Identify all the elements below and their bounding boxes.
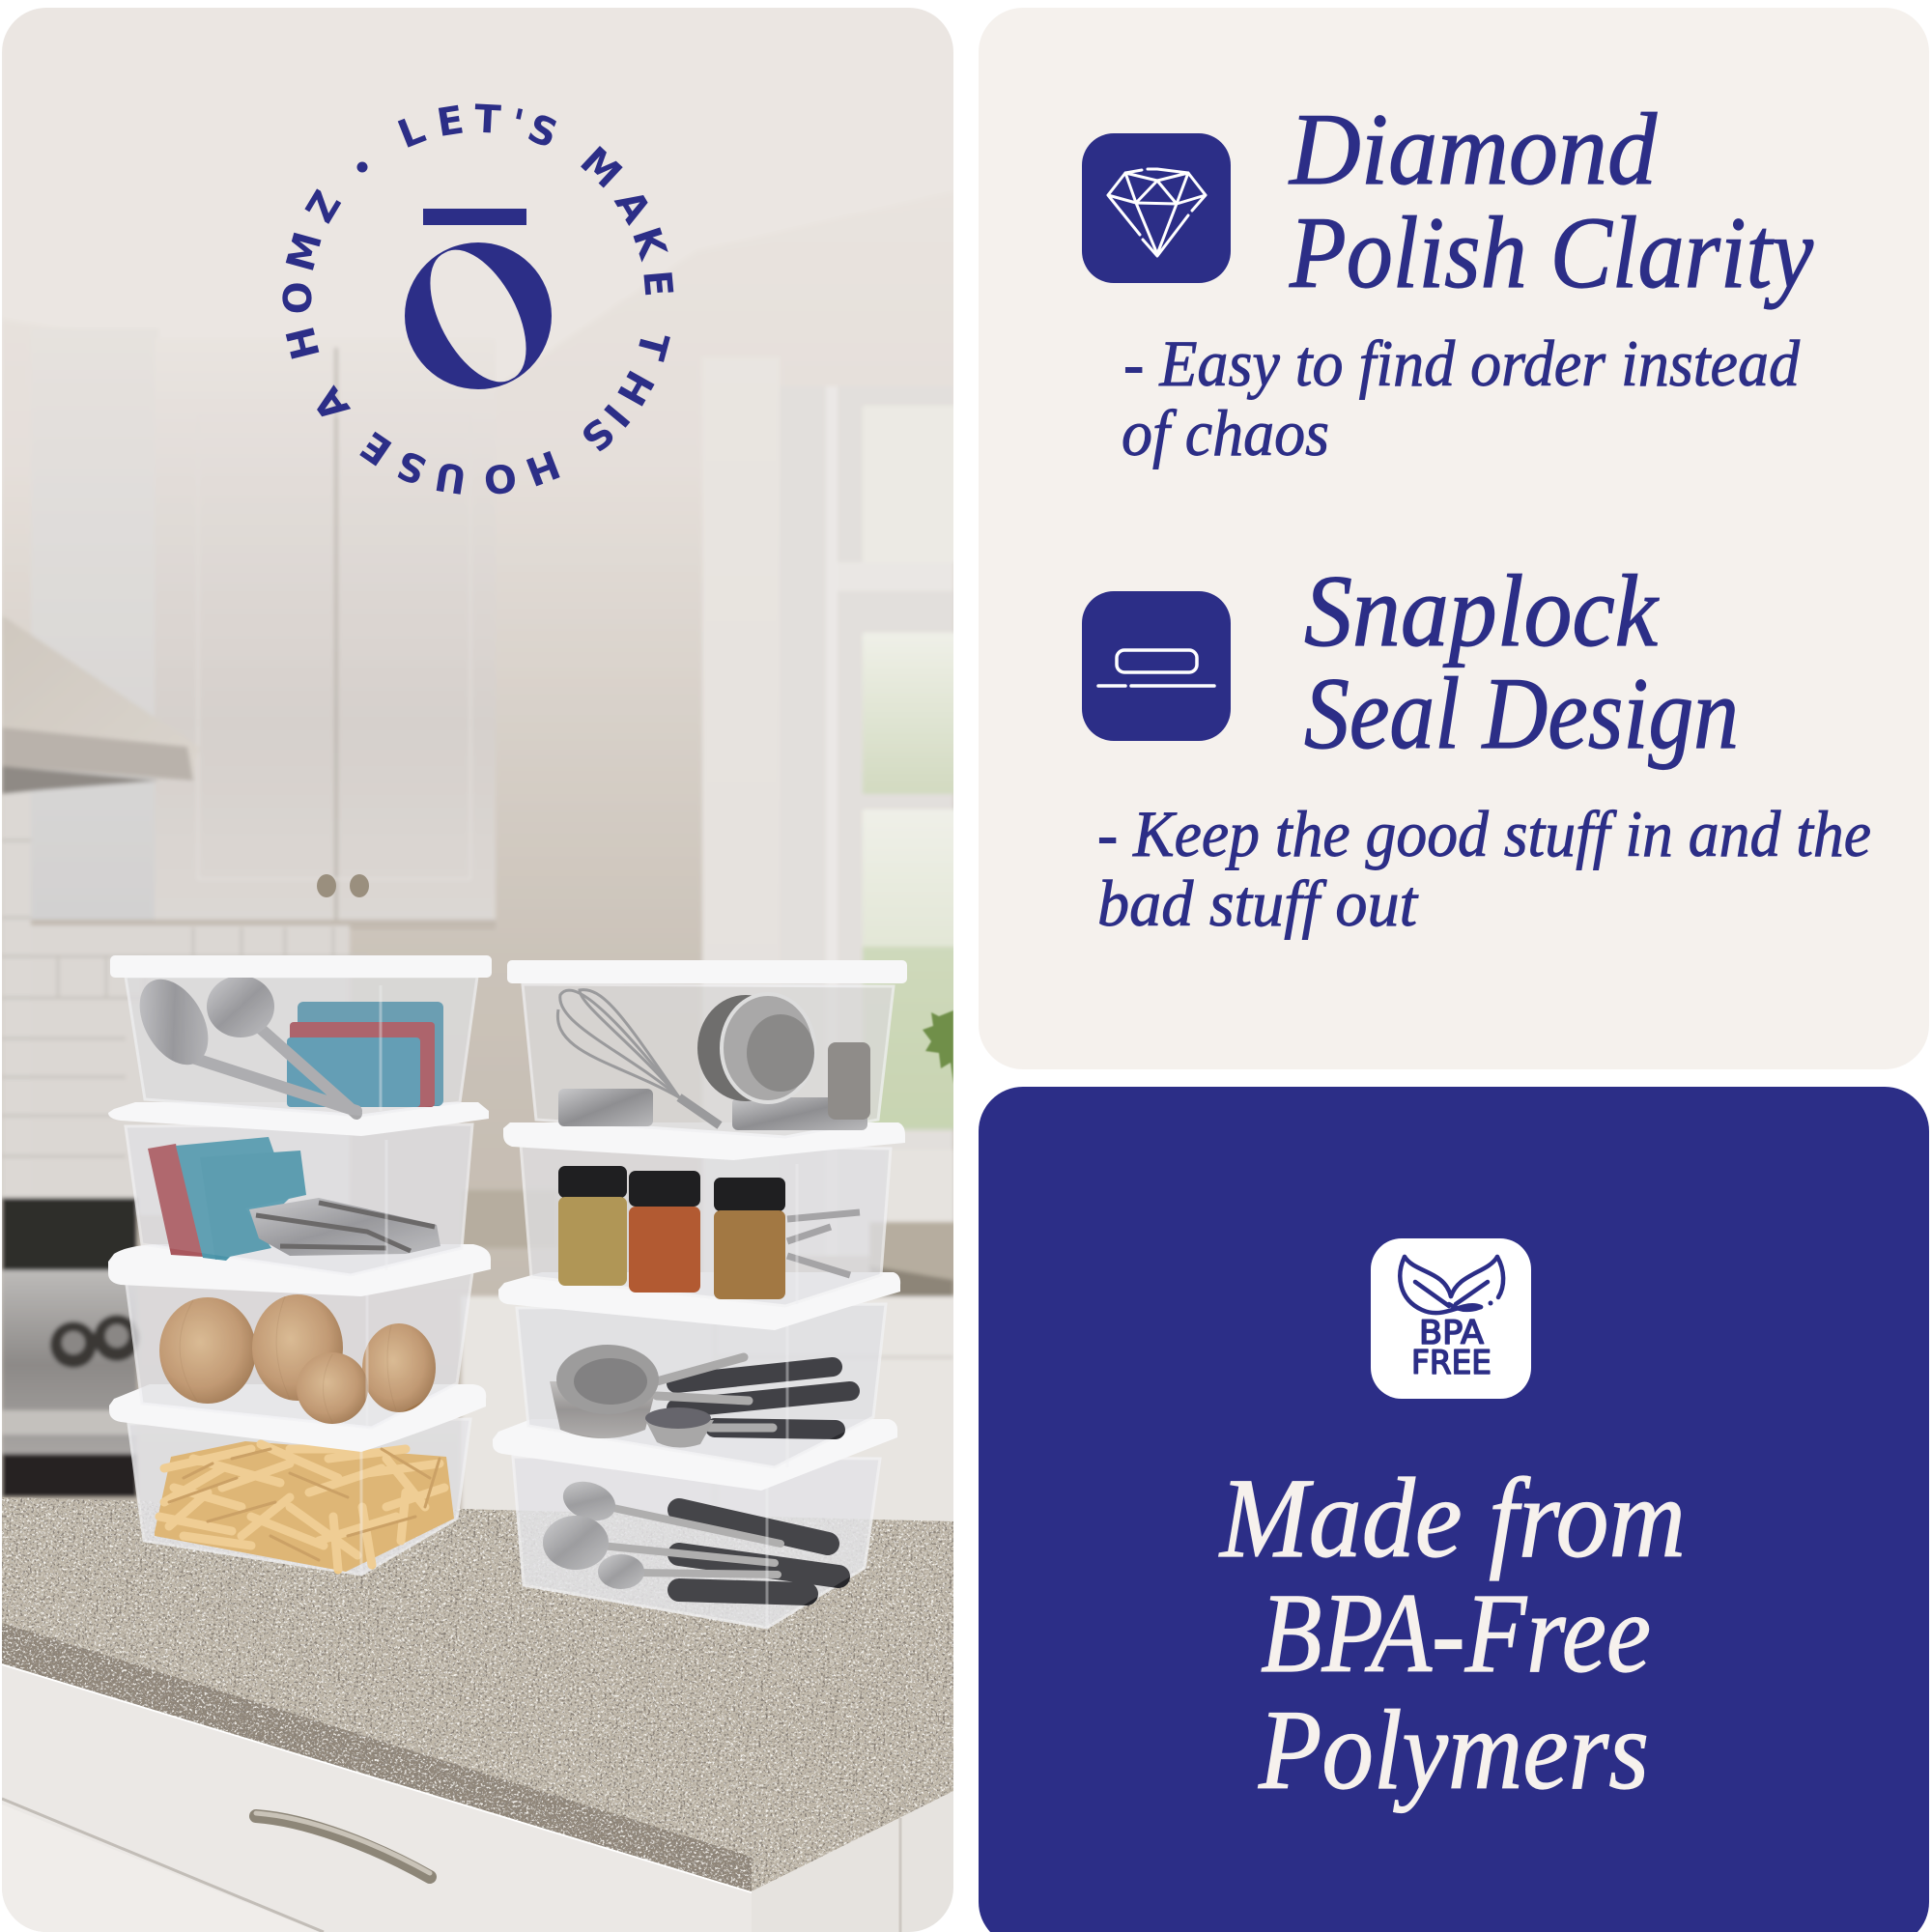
kitchen background bbox=[0, 0, 966, 1546]
container: cutting boards and tongs bbox=[108, 1102, 489, 1275]
cabinet knobs bbox=[317, 874, 369, 897]
range hood bbox=[2, 615, 199, 794]
plant in window bbox=[923, 1010, 953, 1084]
circular slogan: H bbox=[278, 322, 329, 364]
icon: BPA free badge: BPA bbox=[1419, 1314, 1484, 1352]
back counter and lower cabinets bbox=[462, 1150, 966, 1528]
circular slogan: I bbox=[594, 395, 638, 435]
circular slogan: S bbox=[572, 409, 622, 460]
circular slogan: T bbox=[473, 98, 502, 143]
heading: made from BPA-free polymers: Made from bbox=[1218, 1455, 1686, 1581]
circular slogan: O bbox=[481, 454, 519, 502]
granite counter bbox=[2, 1497, 953, 1891]
drawer fronts bbox=[2, 1665, 953, 1932]
circular slogan: E bbox=[634, 269, 680, 298]
panel: features bbox=[979, 8, 1929, 1069]
icon: snaplock seal bbox=[1082, 591, 1231, 741]
icon: diamond bbox=[1082, 133, 1231, 283]
icon: BPA free badge bbox=[1371, 1238, 1531, 1399]
circular slogan: K bbox=[623, 222, 675, 266]
circular slogan: H bbox=[520, 440, 566, 494]
heading: snaplock seal design bbox=[1304, 554, 1739, 770]
container: measuring cups bbox=[498, 1272, 900, 1467]
circular slogan bbox=[276, 98, 680, 502]
stove bbox=[2, 1198, 140, 1497]
circular slogan: ' bbox=[506, 101, 527, 147]
heading: made from BPA-free polymers: BPA-Free bbox=[1261, 1570, 1651, 1696]
circular slogan: S bbox=[390, 440, 433, 493]
text: easy to find order bbox=[1122, 327, 1801, 469]
tile backsplash bbox=[2, 782, 367, 1215]
heading: diamond polish clarity: Polish Clarity bbox=[1289, 196, 1814, 309]
circular slogan: E bbox=[354, 422, 400, 473]
text: keep the good stuff: - Keep the good stuff in and the bbox=[1097, 797, 1871, 870]
circular slogan: A bbox=[305, 379, 358, 429]
circular slogan: M bbox=[278, 227, 331, 276]
circular slogan: M bbox=[572, 139, 630, 197]
circular slogan: S bbox=[522, 106, 563, 157]
circular slogan: A bbox=[606, 183, 659, 231]
text: keep the good stuff: bad stuff out bbox=[1097, 867, 1419, 940]
circular slogan: T bbox=[627, 327, 676, 365]
heading: snaplock seal design: Seal Design bbox=[1304, 657, 1739, 770]
container: measuring spoons bbox=[493, 1419, 897, 1628]
container: spice jars bbox=[503, 1122, 905, 1306]
text: keep the good stuff bbox=[1097, 797, 1871, 940]
container: pasta bbox=[109, 1384, 486, 1575]
container: onions bbox=[108, 1244, 491, 1428]
circular slogan: O bbox=[276, 281, 321, 315]
heading: diamond polish clarity: Diamond bbox=[1288, 93, 1658, 206]
panel: BPA free bbox=[979, 1087, 1929, 1932]
icon: BPA free badge: FREE bbox=[1411, 1344, 1492, 1382]
upper cabinet bbox=[31, 328, 496, 929]
text: easy to find order: - Easy to find order instead bbox=[1123, 327, 1801, 400]
circular slogan: L bbox=[392, 107, 432, 157]
container: ladles and boards bbox=[110, 955, 492, 1116]
logo badge bbox=[276, 98, 680, 502]
circular slogan: U bbox=[432, 453, 469, 501]
window column and frames bbox=[702, 357, 959, 1323]
heading: made from BPA-free polymers bbox=[1218, 1455, 1686, 1813]
heading: diamond polish clarity bbox=[1288, 93, 1814, 309]
circular slogan: Z bbox=[298, 184, 351, 230]
panel: kitchen photo bbox=[0, 0, 966, 1932]
circular slogan: H bbox=[608, 362, 662, 412]
circular slogan: E bbox=[434, 98, 467, 146]
heading: snaplock seal design: Snaplock bbox=[1304, 554, 1660, 668]
heading: made from BPA-free polymers: Polymers bbox=[1258, 1687, 1649, 1813]
container: whisk and cups bbox=[507, 960, 907, 1137]
text: easy to find order: of chaos bbox=[1122, 396, 1329, 469]
